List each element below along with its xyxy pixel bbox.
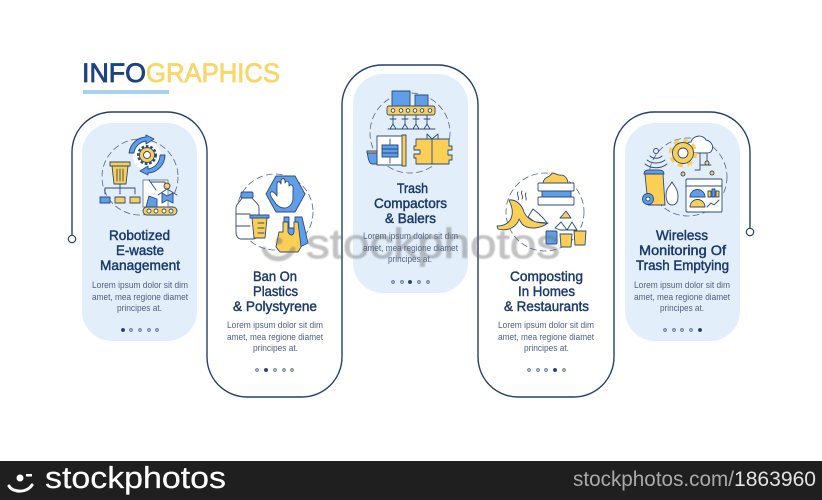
title: INFO <box>82 58 146 88</box>
pagination dots 4 <box>528 368 565 372</box>
text: composting: principes at. <box>524 343 569 353</box>
footer bar: stockphotos.com/ <box>573 468 734 491</box>
footer bar: stockphotos <box>45 460 226 495</box>
text: composting: Lorem ipsum dolor sit dim <box>498 320 594 330</box>
text: composting: In Homes <box>518 283 575 299</box>
text: trash compactors: amet, mea regione diamet <box>363 243 458 253</box>
text: ban on plastics: amet, mea regione diamet <box>227 332 323 342</box>
text: trash compactors: Trash <box>397 180 428 196</box>
text: wireless monitoring: Trash Emptying <box>636 257 729 273</box>
panel backgrounds <box>82 74 740 341</box>
text: robotized e-waste: Lorem ipsum dolor sit dim <box>92 280 188 290</box>
footer bar <box>0 460 822 500</box>
icon: wireless monitoring <box>642 136 727 216</box>
icon: trash compactors <box>367 91 452 173</box>
text: ban on plastics: principes at. <box>253 343 298 353</box>
pagination dots 3 <box>392 280 429 284</box>
icon: composting <box>497 173 586 251</box>
text: robotized e-waste: Robotized <box>109 227 170 243</box>
title <box>82 58 280 94</box>
text: wireless monitoring: Monitoring Of <box>639 242 726 258</box>
icon: ban on plastics <box>236 174 313 252</box>
text: robotized e-waste: amet, mea regione diamet <box>92 292 188 302</box>
text: wireless monitoring: Wireless <box>656 227 708 243</box>
text: wireless monitoring <box>634 227 730 313</box>
text: ban on plastics: & Polystyrene <box>233 298 317 314</box>
icon: robotized e-waste <box>100 135 178 215</box>
text: composting: Composting <box>510 268 583 284</box>
text: wireless monitoring: principes at. <box>660 303 704 313</box>
text: robotized e-waste <box>92 227 188 313</box>
text: wireless monitoring: amet, mea regione diamet <box>634 292 730 302</box>
text: robotized e-waste: principes at. <box>117 303 162 313</box>
text: composting <box>498 268 594 353</box>
text: robotized e-waste: E-waste <box>116 242 164 258</box>
text: trash compactors: Lorem ipsum dolor sit dim <box>363 231 458 241</box>
text: composting: & Restaurants <box>504 298 589 314</box>
title: GRAPHICS <box>146 58 280 88</box>
text: ban on plastics: Lorem ipsum dolor sit dim <box>227 320 323 330</box>
text: composting: amet, mea regione diamet <box>498 332 594 342</box>
text: trash compactors <box>363 180 458 264</box>
text: ban on plastics <box>227 268 323 353</box>
connecting outline <box>68 65 754 397</box>
pagination dots 1 <box>121 328 158 332</box>
pagination dots 5 <box>664 328 702 332</box>
text: ban on plastics: Plastics <box>253 283 298 299</box>
text: trash compactors: Compactors <box>374 195 447 211</box>
text: robotized e-waste: Management <box>100 257 180 273</box>
text: wireless monitoring: Lorem ipsum dolor sit dim <box>634 280 730 290</box>
footer bar: 1863960 <box>734 468 816 491</box>
watermark: stockphotos <box>306 220 560 267</box>
text: ban on plastics: Ban On <box>253 268 297 284</box>
text: trash compactors: & Balers <box>385 210 436 226</box>
text: trash compactors: principes at. <box>388 254 432 264</box>
pagination dots 2 <box>256 368 293 372</box>
